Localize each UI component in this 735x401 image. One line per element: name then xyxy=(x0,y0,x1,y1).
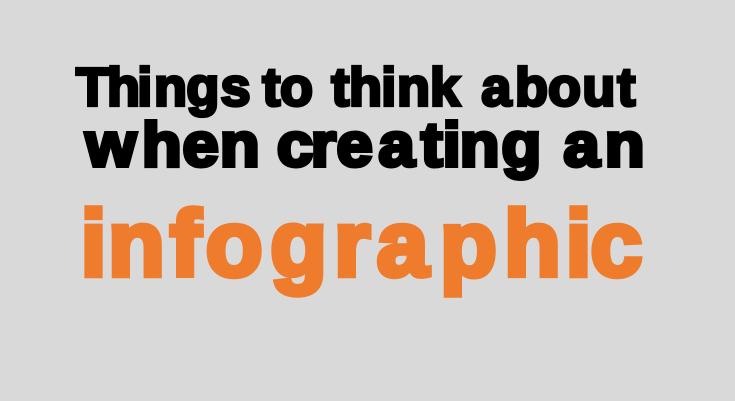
title: line 2: when creating an xyxy=(85,110,645,180)
title: line 1: Things to think about xyxy=(76,58,635,118)
title: highlighted word: infographic xyxy=(81,192,642,296)
